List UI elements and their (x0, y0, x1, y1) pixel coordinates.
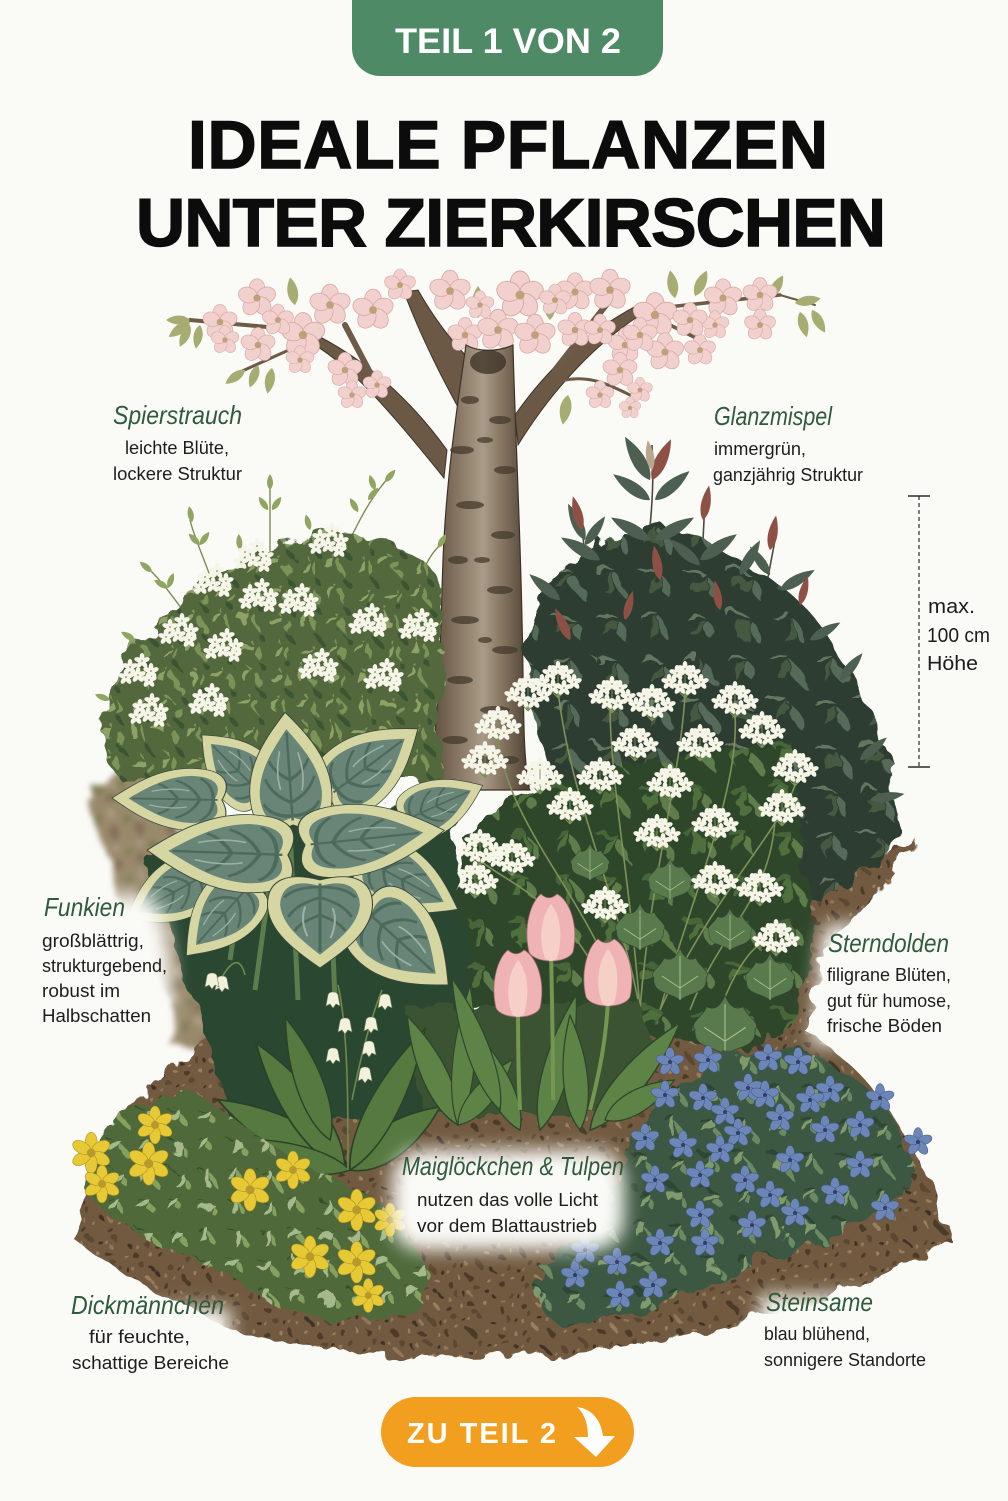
plant: Dickmännchen (70, 1095, 427, 1320)
label: Maiglöckchen & Tulpen: vor dem Blattaustrieb (417, 1216, 597, 1236)
label: Dickmännchen: Dickmännchen (71, 1290, 224, 1320)
plant: Maiglöckchen (205, 963, 449, 1185)
label: max. 100 cm Höhe: 100 cm (927, 625, 990, 647)
label: Maiglöckchen & Tulpen: nutzen das volle Licht (417, 1190, 598, 1210)
label: Glanzmispel: Glanzmispel (714, 401, 833, 431)
label: max. 100 cm Höhe (927, 596, 990, 675)
label: Sterndolden: filigrane Blüten, (827, 965, 951, 985)
button: Zu Teil 2: ZU TEIL 2 (407, 1418, 556, 1450)
label: Sterndolden: Sterndolden (828, 928, 949, 958)
label: Dickmännchen: für feuchte, (89, 1327, 190, 1347)
label: Funkien: Funkien (44, 892, 125, 922)
tree trunk (425, 345, 530, 790)
plant: Tulpen (396, 894, 690, 1139)
title: UNTER ZIERKIRSCHEN (136, 185, 886, 261)
label: Funkien: Halbschatten (42, 1006, 151, 1026)
label: Spierstrauch: leichte Blüte, (125, 438, 229, 458)
badge: Teil 1 von 2: TEIL 1 VON 2 (395, 22, 621, 61)
label: Steinsame: blau blühend, (764, 1324, 870, 1344)
badge: Teil 1 von 2 (352, 0, 663, 76)
central leaf backdrop (410, 1000, 660, 1115)
label: Steinsame (764, 1287, 926, 1370)
label: Steinsame: Steinsame (766, 1287, 873, 1317)
text clearings (20, 895, 1000, 1378)
tree blossoms (166, 268, 829, 426)
label: Glanzmispel (713, 401, 863, 485)
label: Funkien: großblättrig, (42, 931, 144, 951)
plant: Sterndolden (450, 661, 819, 1055)
title: IDEALE PFLANZEN (188, 107, 828, 183)
label: Maiglöckchen & Tulpen: Maiglöckchen & Tulpen (402, 1151, 624, 1181)
label: max. 100 cm Höhe: max. (928, 596, 975, 618)
tree branches (190, 290, 815, 478)
label: Glanzmispel: immergrün, (714, 439, 806, 459)
height measure bracket (908, 496, 930, 767)
label: Dickmännchen (71, 1290, 229, 1373)
label: Glanzmispel: ganzjährig Struktur (713, 465, 863, 485)
label: Sterndolden: frische Böden (827, 1016, 942, 1036)
label: Funkien (42, 892, 167, 1026)
label: Steinsame: sonnigere Standorte (764, 1350, 926, 1370)
label: Sterndolden (827, 928, 951, 1036)
label: Maiglöckchen & Tulpen (402, 1151, 624, 1236)
plant: Steinsame (538, 1044, 933, 1325)
label: max. 100 cm Höhe: Höhe (927, 653, 978, 675)
label: Spierstrauch: Spierstrauch (113, 400, 242, 430)
plant: Spierstrauch (94, 468, 449, 780)
plant: Glanzmispel (524, 433, 905, 900)
icon: curved arrow (574, 1407, 615, 1457)
button: Zu Teil 2 (381, 1397, 634, 1467)
plant: Funkien (111, 700, 494, 1120)
label: Sterndolden: gut für humose, (827, 991, 951, 1011)
soil bed (70, 770, 950, 1356)
title (136, 107, 886, 261)
label: Funkien: strukturgebend, (42, 956, 167, 976)
label: Spierstrauch: lockere Struktur (113, 464, 242, 484)
label: Spierstrauch (113, 400, 242, 484)
label: Funkien: robust im (42, 981, 120, 1001)
label: Dickmännchen: schattige Bereiche (72, 1353, 229, 1373)
